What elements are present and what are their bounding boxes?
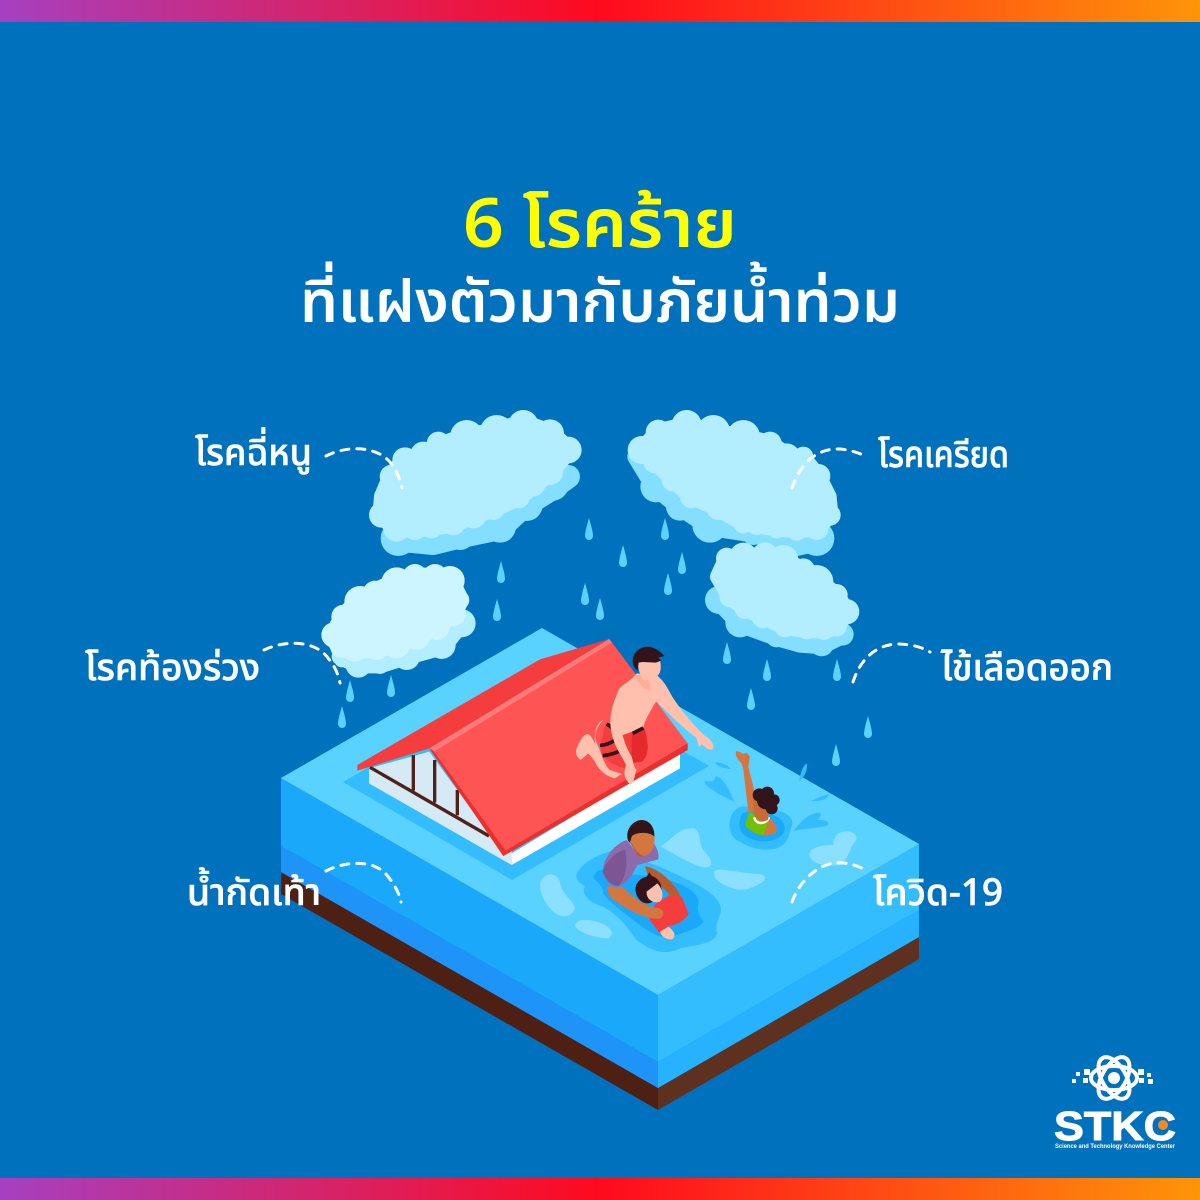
flood block — [281, 628, 919, 1110]
logo atom icon — [1091, 1052, 1137, 1104]
logo pixels — [1072, 1069, 1153, 1084]
label: stress: โรคเครียด — [878, 428, 1009, 484]
necklace — [754, 817, 769, 823]
house — [357, 639, 688, 865]
child hair — [635, 872, 661, 903]
child shirt — [649, 895, 689, 933]
woman and child in water — [540, 820, 740, 952]
swimsuit — [745, 812, 772, 835]
cloud: lower right — [705, 542, 859, 656]
man shorts — [601, 723, 648, 768]
cloud: lower left — [321, 564, 476, 678]
logo tagline: Science and Technology Knowledge Center — [1055, 1144, 1176, 1150]
logo orange dot — [1158, 1120, 1168, 1130]
bottom gradient bar — [0, 1178, 1200, 1200]
cloud: upper left — [369, 410, 582, 556]
label: dengue: ไข้เลือดออก — [940, 641, 1113, 697]
title — [300, 175, 900, 349]
curly hair — [753, 787, 780, 814]
man shorts stripes — [600, 724, 643, 756]
top gradient bar — [0, 0, 1200, 22]
highlights — [540, 828, 740, 938]
man far arm — [655, 675, 713, 750]
man hair — [633, 647, 665, 671]
splashes — [704, 762, 829, 831]
highlights — [661, 828, 856, 890]
woman shirt — [603, 840, 659, 887]
cloud: upper right — [628, 410, 841, 556]
logo: STKC — [1054, 1052, 1176, 1150]
woman neck shade — [628, 840, 650, 857]
label: athlete's foot: น้ำกัดเท้า — [187, 866, 321, 922]
woman hair — [627, 820, 654, 843]
child face — [647, 883, 662, 902]
man chest shade — [635, 675, 650, 691]
man on roof — [576, 647, 713, 785]
woman near arm — [607, 885, 663, 919]
title line 2: ที่แฝงตัวมากับภัยน้ำท่วม — [300, 259, 900, 349]
block: side water — [281, 778, 658, 1062]
house wall left — [369, 768, 512, 865]
raindrops — [338, 518, 872, 766]
woman far arm — [645, 866, 683, 903]
house slab water — [343, 668, 709, 880]
logo wordmark: STKC — [1054, 1103, 1176, 1149]
shoulder — [763, 818, 777, 835]
inner ripple — [593, 869, 703, 937]
man face — [637, 659, 661, 681]
neck — [753, 798, 768, 821]
outer ripple — [729, 806, 792, 850]
block: top water surface — [281, 628, 919, 995]
label: leptospirosis: โรคฉี่หนู — [195, 426, 312, 482]
roof ridge highlight — [429, 639, 612, 752]
man near arm — [610, 690, 637, 785]
disease labels — [85, 426, 1113, 922]
woman face — [629, 833, 655, 856]
title line 1: 6 โรคร้าย — [463, 175, 737, 278]
man legs — [576, 720, 622, 778]
back roof — [357, 639, 609, 771]
dashed connector lines — [264, 449, 930, 902]
outer ripple — [576, 850, 721, 952]
block: lower water band — [281, 846, 658, 1088]
gable beams — [370, 755, 489, 836]
roof eave shade — [429, 743, 688, 856]
house wall right — [512, 752, 680, 865]
child legs — [660, 927, 675, 939]
label: diarrhea: โรคท้องร่วง — [85, 641, 260, 697]
inner ripple — [739, 811, 785, 841]
roof main face — [429, 639, 688, 856]
raised arm — [736, 751, 755, 812]
man torso — [611, 673, 659, 735]
gable window — [369, 752, 503, 853]
label: covid: โควิด-19 — [873, 866, 1003, 922]
swimming child and splashes — [661, 751, 856, 890]
block: brown soil — [281, 872, 658, 1110]
